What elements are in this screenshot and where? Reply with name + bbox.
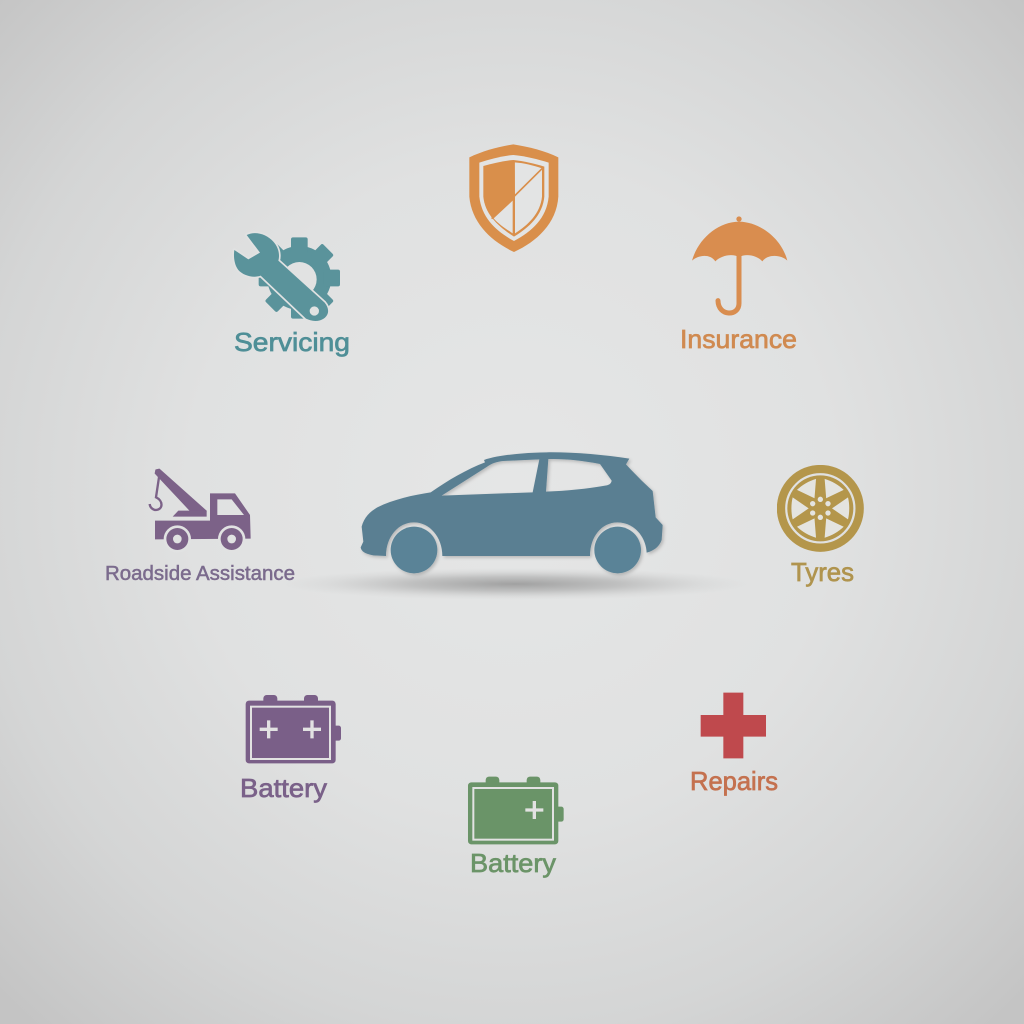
ground shadow under car	[280, 568, 750, 600]
label: Insurance: Insurance	[680, 324, 797, 354]
icon: shield	[469, 144, 558, 252]
label: Repairs: Repairs	[690, 766, 778, 796]
label: Tyres: Tyres	[791, 557, 854, 587]
label: Servicing: Servicing	[234, 327, 350, 357]
icon: tow truck	[150, 469, 251, 553]
icon: wheel	[781, 469, 860, 548]
icon: umbrella	[692, 216, 787, 313]
icon: green battery	[468, 777, 564, 844]
label: green Battery: Battery	[470, 848, 556, 878]
central car illustration	[361, 452, 663, 573]
icon: wrench and gear	[234, 233, 340, 321]
icon: purple battery	[246, 695, 341, 763]
icon: red cross	[701, 693, 766, 758]
label: Roadside Assistance: Roadside Assistance	[105, 563, 295, 585]
label: purple Battery: Battery	[240, 773, 327, 803]
